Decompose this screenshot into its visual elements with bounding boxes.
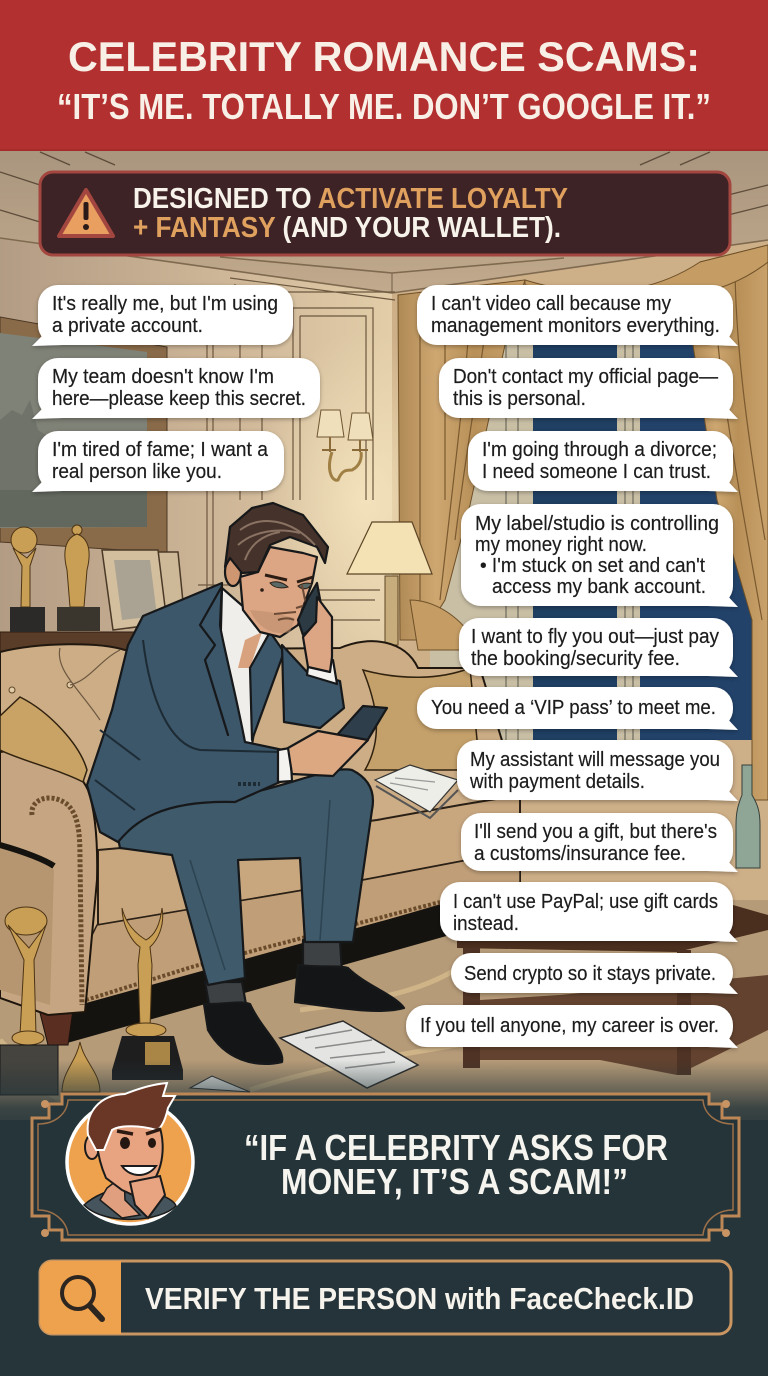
- bubble: tired of fame: real person like you.: [52, 460, 222, 483]
- quote text: MONEY, IT’S A SCAM!”: [281, 1161, 628, 1202]
- bubble: gift customs fee: a customs/insurance fee.: [474, 842, 686, 865]
- suit jacket: [87, 583, 283, 842]
- ornate frame: [32, 1094, 739, 1240]
- curtains: [398, 245, 768, 800]
- bubble: label controlling money: access my bank account.: [492, 575, 706, 598]
- icon: warning triangle: [59, 190, 113, 236]
- trophies on shelf: [10, 525, 100, 632]
- bubble: booking fee: [459, 618, 738, 677]
- bubble: divorce: I'm going through a divorce;: [482, 438, 717, 461]
- smartphone in hand: [337, 706, 387, 741]
- shirt cuffs: [278, 660, 337, 782]
- floor papers: [190, 1021, 418, 1092]
- bubble: keep secret: My team doesn't know I'm: [52, 365, 274, 388]
- walls: [0, 152, 768, 1000]
- quote text: “IF A CELEBRITY ASKS FOR: [244, 1127, 668, 1168]
- speech bubbles: right column: [406, 285, 738, 1048]
- quote panel: [32, 1083, 739, 1240]
- bubble: booking fee: I want to fly you out—just pay: [471, 625, 720, 648]
- socks: [205, 940, 342, 1010]
- wall panels: [198, 278, 475, 670]
- banner text: DESIGNED TO ACTIVATE LOYALTY: [133, 183, 568, 215]
- bubble: tired of fame: [32, 431, 284, 492]
- bubble: gift customs fee: [461, 813, 738, 872]
- warning banner: [40, 172, 730, 255]
- bubble: no video call: management monitors everything.: [431, 314, 720, 337]
- bubble: crypto: [451, 953, 738, 994]
- bubble: career over: If you tell anyone, my career is over.: [420, 1014, 719, 1037]
- trousers: [118, 769, 373, 985]
- jacket buttons: [238, 782, 260, 786]
- bubble: booking fee: the booking/security fee.: [471, 647, 680, 670]
- bottom dark fade: [0, 1060, 768, 1140]
- neck and face: [240, 547, 317, 637]
- bubble: assistant: with payment details.: [469, 770, 645, 793]
- hair: [225, 503, 328, 573]
- wall sconce: [317, 410, 373, 480]
- avatar: cartoon man: [67, 1083, 193, 1224]
- ceiling: [0, 150, 768, 310]
- shoes: [204, 1002, 282, 1064]
- banner text: [133, 183, 568, 244]
- jacket lapel right: [250, 632, 284, 740]
- bubble: no video call: I can't video call because my: [431, 292, 672, 315]
- floor trophies: [0, 907, 183, 1095]
- bubble: official page: Don't contact my official page—: [453, 365, 718, 388]
- bubble: label controlling money: My label/studio is controlling: [475, 512, 719, 535]
- bubble: divorce: [468, 431, 738, 492]
- illustration: luxury living room scene: [0, 150, 768, 1120]
- bubble: official page: [439, 358, 738, 419]
- ear: [225, 558, 241, 586]
- floor lamp: [347, 522, 432, 645]
- bubble: private account: It's really me, but I'm using: [52, 292, 278, 315]
- verify text: VERIFY THE PERSON with FaceCheck.ID: [145, 1281, 694, 1316]
- quote text: [244, 1127, 668, 1202]
- bubble: assistant: [457, 740, 738, 801]
- painting: [0, 317, 167, 553]
- floor: [0, 900, 768, 1120]
- bubble: keep secret: here—please keep this secret.: [52, 387, 306, 410]
- bubble: keep secret: [32, 358, 320, 419]
- bubble: gift cards: I can't use PayPal; use gift cards: [453, 890, 718, 913]
- phone at ear: [298, 583, 322, 635]
- bubble: gift cards: [440, 882, 738, 942]
- speech bubbles: left column: [32, 285, 320, 492]
- orange icon tab: [40, 1261, 121, 1334]
- stubble and features: [250, 610, 295, 633]
- bubble: VIP pass: You need a ‘VIP pass’ to meet me.: [431, 696, 716, 719]
- lower hand: [288, 731, 368, 776]
- bubble: private account: [32, 285, 293, 346]
- raised hand: [303, 597, 332, 672]
- bubble: career over: [406, 1005, 738, 1048]
- man in dark suit on the phone: [87, 503, 404, 1064]
- papers on sofa: [375, 765, 458, 818]
- sofa: [0, 641, 520, 1045]
- bubble: gift cards: instead.: [453, 912, 519, 935]
- coffee table and bottle: [457, 765, 768, 1075]
- bubble: divorce: I need someone I can trust.: [482, 460, 711, 483]
- bubble: no video call: [417, 285, 738, 346]
- bubble: private account: a private account.: [52, 314, 203, 337]
- window: [430, 340, 752, 740]
- title: CELEBRITY ROMANCE SCAMS:: [68, 33, 700, 80]
- bubble: assistant: My assistant will message you: [470, 748, 720, 771]
- bubble: VIP pass: [417, 687, 738, 730]
- bubble: gift customs fee: I'll send you a gift, but there's: [474, 820, 717, 843]
- shelf: [0, 632, 135, 652]
- title: [57, 33, 711, 127]
- jacket sleeve raised arm: [282, 645, 344, 728]
- cushions: [0, 668, 480, 782]
- bubble: label controlling money: [461, 504, 738, 607]
- bubble: label controlling money: my money right now.: [475, 533, 647, 556]
- framed photos: [102, 550, 184, 630]
- bubble: tired of fame: I'm tired of fame; I want a: [52, 438, 269, 461]
- verify bar: [40, 1261, 731, 1334]
- shirt: [218, 588, 270, 745]
- bubble: official page: this is personal.: [453, 387, 586, 410]
- bubble: crypto: Send crypto so it stays private.: [464, 962, 716, 985]
- header band: [0, 0, 768, 151]
- banner text: + FANTASY (AND YOUR WALLET).: [133, 212, 561, 244]
- icon: magnifying glass: [62, 1277, 102, 1319]
- bubble: label controlling money: • I'm stuck on set and can't: [480, 554, 705, 577]
